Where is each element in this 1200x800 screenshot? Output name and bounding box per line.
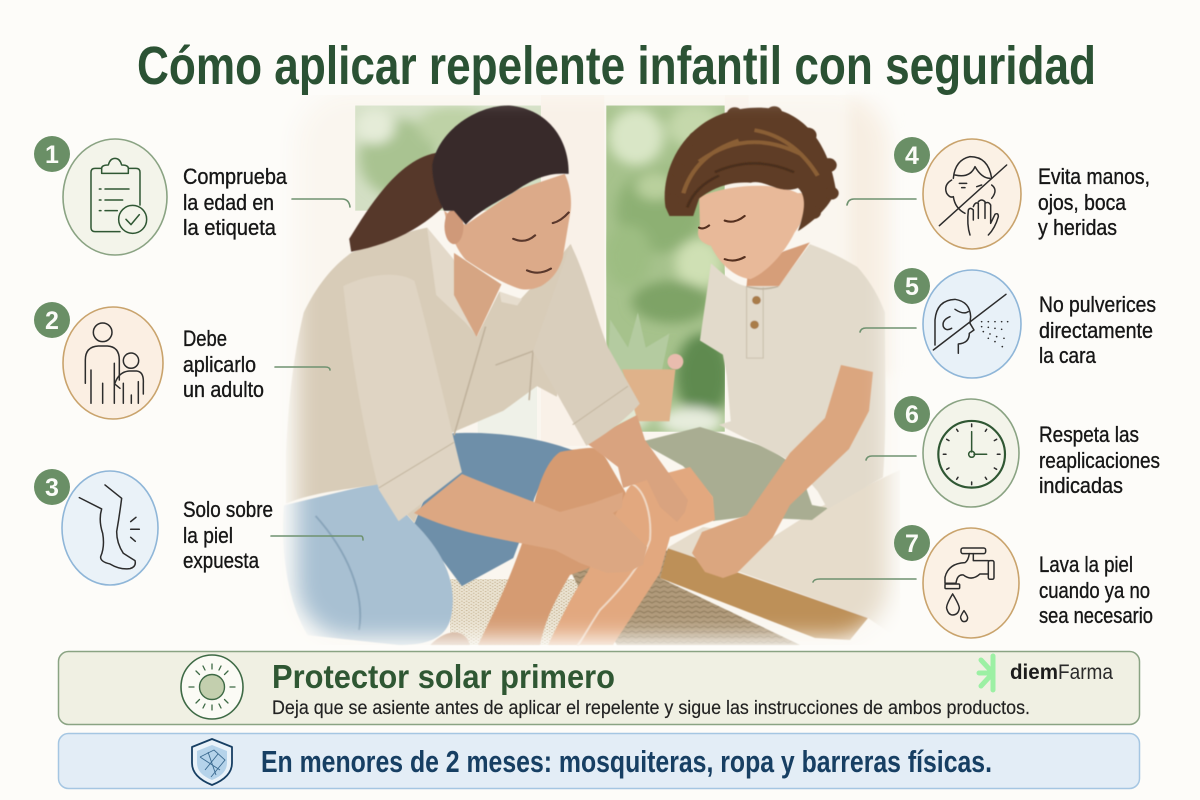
text: step 4: ojos, boca <box>1038 190 1127 215</box>
text: step 5: No pulverices <box>1039 292 1156 317</box>
text: under 2 months message: En menores de 2 meses: mosquiteras, ropa y barreras físicas. <box>261 744 992 779</box>
step 1: check age on label <box>34 136 288 255</box>
text: step 6: indicadas <box>1039 473 1123 498</box>
text: step 4: y heridas <box>1038 215 1117 240</box>
logo: diemFarma: Farma <box>1058 661 1113 684</box>
text: step 2: un adulto <box>183 377 264 402</box>
icon: clock <box>923 399 1019 507</box>
mother's jeans <box>283 433 575 645</box>
text: step 7 <box>1039 552 1153 628</box>
badge 4 <box>894 137 930 173</box>
badge 6: 6 <box>905 401 919 429</box>
boy's shorts <box>640 427 828 521</box>
text: step 7: Lava la piel <box>1039 552 1133 577</box>
badge 3 <box>34 469 70 505</box>
icon: clipboard with check <box>63 139 167 255</box>
text: step 5: directamente <box>1039 318 1153 343</box>
boy's arm and hand <box>692 365 873 578</box>
bench <box>570 470 900 645</box>
photo: mother applying repellent on child's leg <box>280 95 900 645</box>
step 2: adult must apply <box>34 302 264 419</box>
text: step 1: la edad en <box>183 190 274 215</box>
text: step 7: sea necesario <box>1039 603 1153 628</box>
logo: diemFarma <box>979 656 1113 690</box>
heading: sunscreen first: Protector solar primero <box>272 658 615 695</box>
badge 6 <box>894 396 930 432</box>
text: step 2: Debe <box>183 326 227 351</box>
badge 2 <box>34 302 70 338</box>
icon: leg <box>62 471 158 585</box>
text: step 4 <box>1038 164 1150 240</box>
badge 4: 4 <box>905 142 919 170</box>
text: step 4: Evita manos, <box>1038 164 1150 189</box>
boy's t-shirt <box>700 244 885 509</box>
text: step 5 <box>1039 292 1156 368</box>
connector lines <box>271 199 916 582</box>
panel: under 2 months <box>58 734 1140 788</box>
room background <box>280 95 900 645</box>
text: step 3: expuesta <box>183 548 260 573</box>
icon: sun <box>181 655 243 719</box>
badge 5: 5 <box>905 273 919 301</box>
badge 1 <box>34 136 70 172</box>
step 3: only on exposed skin <box>34 469 273 585</box>
text: step 1: Comprueba <box>183 164 288 189</box>
text: step 6: Respeta las <box>1039 422 1139 447</box>
text: step 3: Solo sobre <box>183 497 273 522</box>
text: step 6 <box>1039 422 1160 498</box>
step 4: avoid hands, eyes, mouth, wounds <box>894 137 1150 249</box>
logo: diemFarma: diem <box>1010 661 1058 684</box>
step 6: respect reapplications <box>894 396 1160 507</box>
mother's head <box>349 106 571 337</box>
badge 3: 3 <box>45 474 59 502</box>
text: sunscreen instructions: Deja que se asiente antes de aplicar el repelente y sigue las instrucciones de ambos productos. <box>272 698 1030 719</box>
boy's back leg <box>478 448 630 645</box>
badge 1: 1 <box>45 141 59 169</box>
boy's front leg <box>548 467 715 645</box>
badge 7 <box>894 525 930 561</box>
boy's head <box>665 106 839 286</box>
badge 7: 7 <box>905 530 919 558</box>
icon: shield <box>192 739 232 785</box>
text: step 1: la etiqueta <box>183 215 277 240</box>
text: step 2 <box>183 326 264 402</box>
text: step 5: la cara <box>1039 343 1097 368</box>
repellent streaks <box>578 484 650 645</box>
badge 5 <box>894 268 930 304</box>
step 7: wash skin when no longer needed <box>894 525 1153 638</box>
mother's arms and hands <box>414 415 688 573</box>
text: step 2: aplicarlo <box>183 352 256 377</box>
text: step 6: reaplicaciones <box>1039 448 1160 473</box>
mother's sleeves <box>343 244 640 521</box>
icon: faucet with drops <box>923 528 1019 638</box>
step 5: do not spray directly on face <box>894 268 1156 378</box>
mother's shirt <box>286 228 581 523</box>
icon: profile and spray crossed out <box>923 270 1021 378</box>
badge 2: 2 <box>45 307 59 335</box>
icon: adult and child <box>63 307 163 419</box>
text: step 7: cuando ya no <box>1039 578 1150 603</box>
icon: face and hand crossed out <box>923 139 1021 249</box>
text: step 3 <box>183 497 273 573</box>
text: step 3: la piel <box>183 523 233 548</box>
text: step 1 <box>183 164 288 240</box>
panel: sunscreen first <box>58 652 1140 724</box>
